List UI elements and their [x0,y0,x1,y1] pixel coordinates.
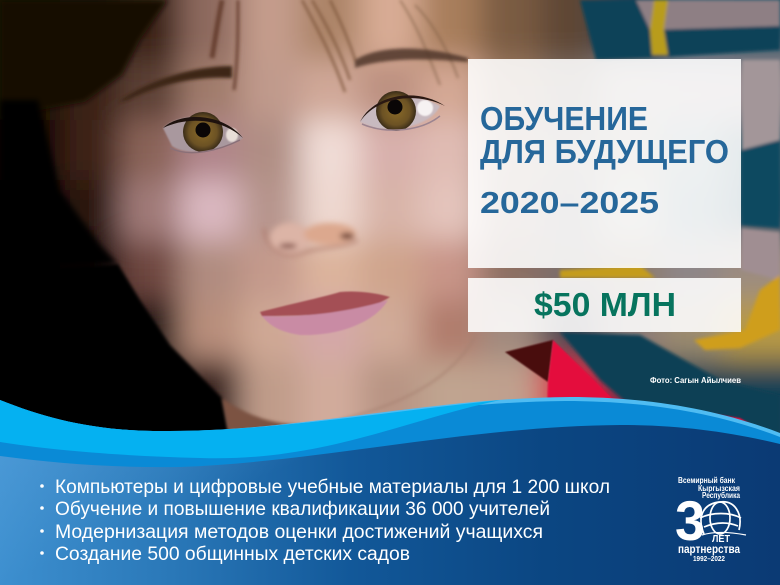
heading: title: ОБУЧЕНИЕ [480,100,648,137]
eyebrows [118,48,468,102]
dark surround and hair silhouette [0,264,230,440]
heading: title: ДЛЯ БУДУЩЕГО [480,133,729,170]
lips [260,291,390,335]
icon: globe [700,502,746,535]
hair strands [212,0,458,92]
heading: years: 2020–2025 [480,185,659,220]
logo: World Bank Kyrgyz Republic 30 years of partnership: 3 [675,489,705,552]
bullet 4: Создание 500 общинных детских садов [55,544,410,565]
shirt [505,340,780,440]
logo: World Bank Kyrgyz Republic 30 years of partnership: Всемирный банк [678,476,736,485]
logo: World Bank Kyrgyz Republic 30 years of partnership: партнерства [678,544,741,556]
logo: World Bank Kyrgyz Republic 30 years of partnership: 1992–2022 [693,556,725,563]
wave: blue bands [0,397,780,585]
photo credit: Фото: Сагын Айылчиев [650,376,741,385]
rug pattern [560,0,780,440]
jaw line [340,335,476,420]
panel: title card [468,59,741,268]
logo: World Bank Kyrgyz Republic 30 years of partnership: Кыргызская [698,484,740,493]
logo: World Bank Kyrgyz Republic 30 years of partnership: Республика [702,491,740,500]
bullet list [40,477,610,565]
logo: World Bank Kyrgyz Republic 30 years of partnership: ЛЕТ [712,534,730,545]
nose [264,223,358,255]
bullet 1: Компьютеры и цифровые учебные материалы для 1 200 школ [55,477,610,498]
bullet 3: Модернизация методов оценки достижений учащихся [55,522,543,543]
logo: World Bank Kyrgyz Republic 30 years of partnership [675,476,746,563]
amount: $50 МЛН [534,286,676,323]
panel: bottom gradient with bullet list [0,425,780,585]
bullet 2: Обучение и повышение квалификации 36 000 учителей [55,499,550,520]
icon: left eye [163,112,243,153]
panel: budget [468,278,741,332]
icon: right eye [360,91,445,131]
